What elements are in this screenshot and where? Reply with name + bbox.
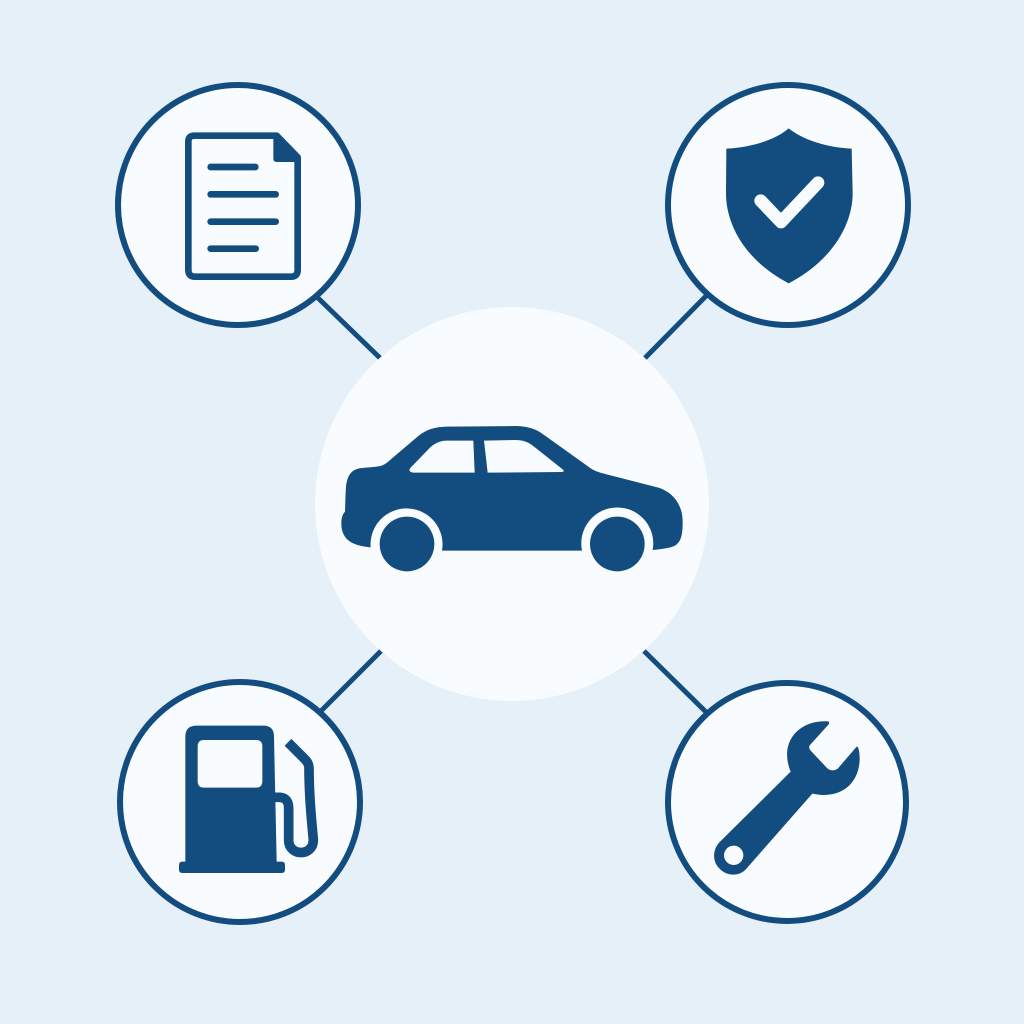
- shield: [726, 128, 853, 283]
- panel: document: [118, 85, 358, 325]
- wrench shape: [714, 721, 860, 875]
- document circle: [118, 85, 358, 325]
- panel: wrench: [668, 683, 906, 921]
- hose and nozzle: [275, 742, 313, 852]
- connector: wrench to car: [644, 651, 706, 712]
- page fold: [273, 134, 301, 162]
- fuel circle: [120, 682, 360, 922]
- connector: fuel pump to car: [320, 651, 381, 712]
- text lines: [211, 167, 276, 249]
- wrench circle: [668, 683, 906, 921]
- panel: fuel pump: [120, 682, 360, 922]
- check mark: [761, 183, 818, 222]
- hub circle: [315, 307, 709, 701]
- icon: wrench: [714, 721, 860, 875]
- icon: document: [188, 134, 301, 277]
- page outline: [188, 136, 298, 277]
- icon: fuel pump: [179, 726, 313, 873]
- connector lines: [317, 295, 707, 712]
- icon: shield with check: [726, 128, 853, 283]
- car body: [341, 426, 683, 551]
- front wheel: [590, 517, 645, 571]
- central hub with car: [315, 307, 709, 701]
- rear wheel: [380, 517, 434, 571]
- panel: shield: [668, 85, 908, 325]
- connector: document to car: [317, 297, 380, 358]
- pump body: [179, 726, 285, 873]
- icon: car: [341, 426, 683, 571]
- connector: shield to car: [645, 295, 707, 358]
- shield circle: [668, 85, 908, 325]
